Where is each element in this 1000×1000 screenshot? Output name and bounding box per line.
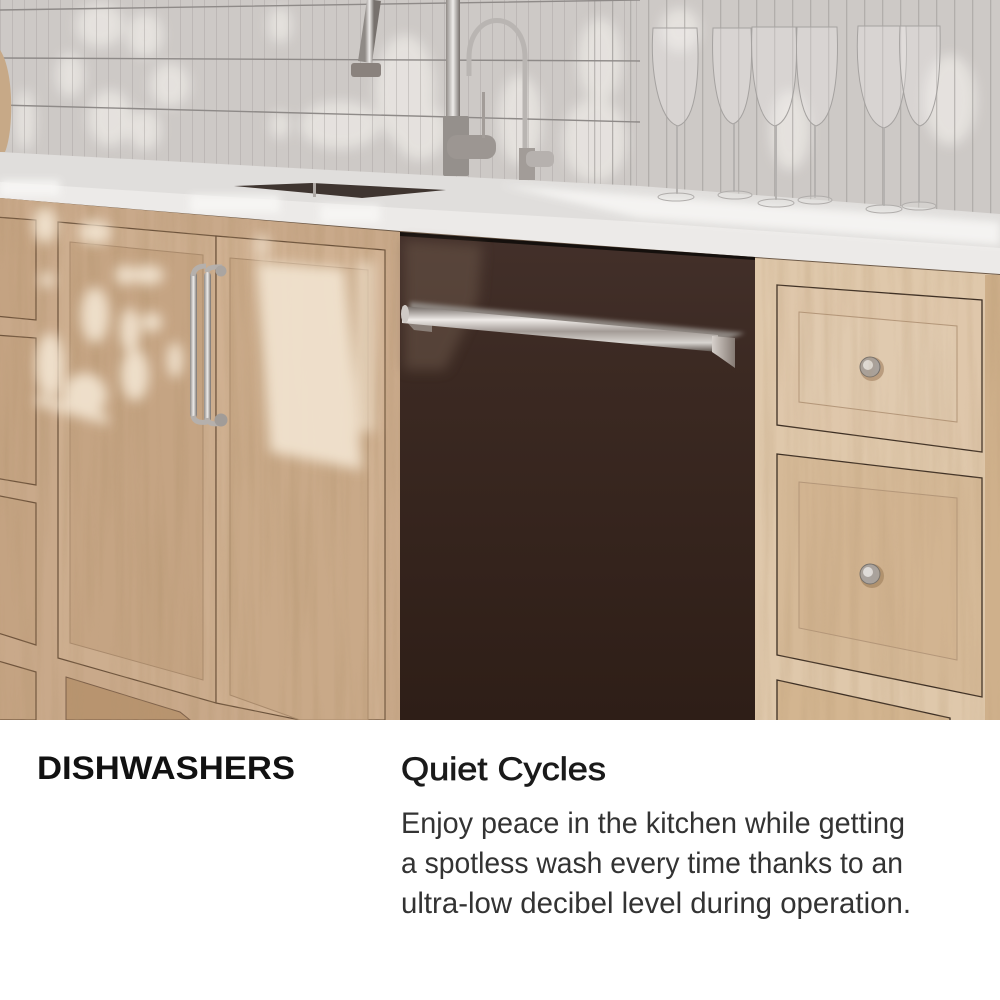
lower cabinet rail — [66, 677, 190, 720]
feature text block — [401, 751, 911, 920]
left base cabinet — [0, 198, 400, 720]
feature description: ultra-low decibel level during operation. — [401, 887, 911, 920]
door pulls — [190, 266, 228, 426]
wine glasses — [652, 26, 940, 213]
feature description: Enjoy peace in the kitchen while getting — [401, 807, 905, 840]
wood grain overlay — [0, 206, 386, 720]
right base cabinet — [755, 255, 1000, 722]
feature description — [401, 807, 911, 920]
knob — [860, 357, 884, 381]
category heading: DISHWASHERS — [37, 750, 295, 786]
feature description: a spotless wash every time thanks to an — [401, 847, 903, 880]
right wood grain overlay — [755, 255, 1000, 720]
backsplash tile wall — [0, 0, 1000, 214]
feature title: Quiet Cycles — [401, 751, 606, 787]
bottom drawer — [777, 680, 950, 722]
dishwasher handle — [401, 302, 745, 368]
knob — [860, 564, 884, 588]
cutting board — [0, 50, 11, 152]
left drawer fronts — [0, 217, 36, 720]
sunlight patches — [33, 207, 375, 470]
top drawer — [777, 285, 982, 452]
sink — [234, 183, 446, 198]
faucets — [351, 0, 554, 180]
middle drawer — [777, 454, 982, 697]
dishwasher panel — [400, 232, 755, 720]
kitchen photo — [0, 0, 1000, 722]
pull-down sprayer — [365, 0, 374, 62]
filtered water tap — [469, 20, 525, 150]
cabinet door left — [58, 222, 216, 703]
countertop — [0, 152, 1000, 278]
cabinet door right — [216, 236, 385, 720]
